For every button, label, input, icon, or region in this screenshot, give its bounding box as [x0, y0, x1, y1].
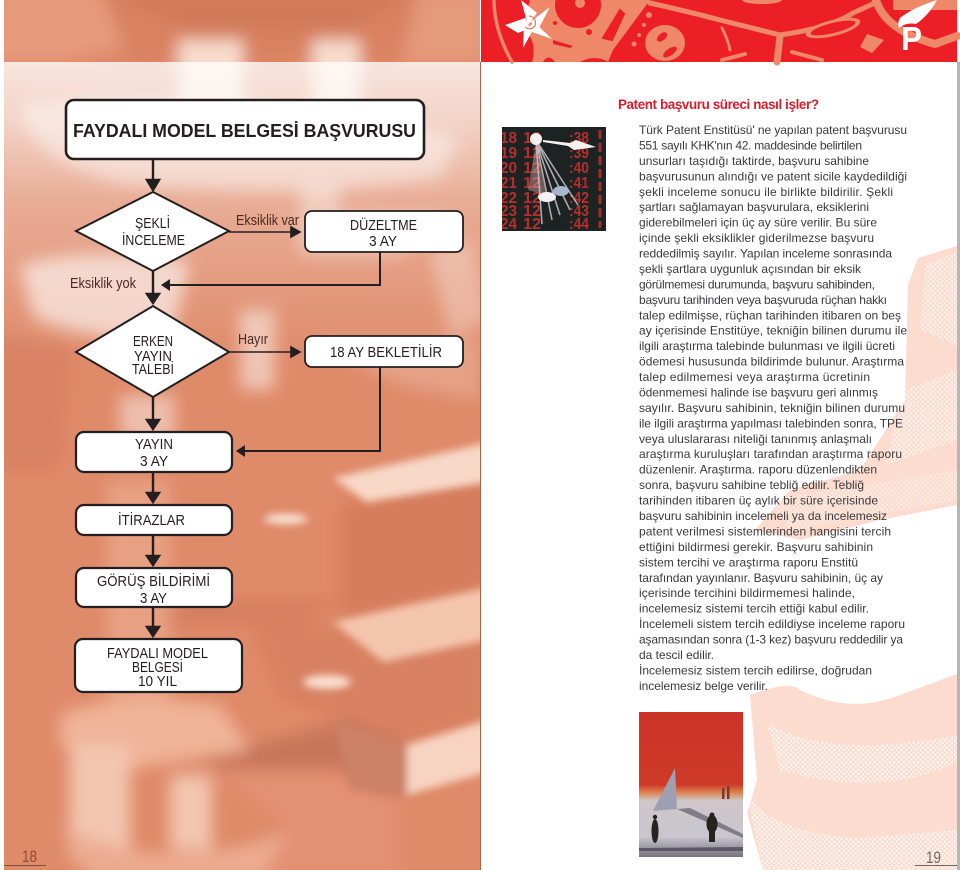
body text: şekli şartlara uygunluk açısından bir eksik	[639, 262, 862, 276]
photo: clock over digital numbers: 18	[500, 130, 517, 147]
diamond: form review: ŞEKLİ	[135, 214, 170, 232]
body text: ilgili araştırma talebinde bulunması ve ilgili ücreti	[639, 339, 895, 353]
arrow: to 18 month wait	[229, 347, 300, 357]
photo: clock over digital numbers: 21	[500, 175, 517, 192]
photo: clock over digital numbers: :43	[569, 203, 589, 220]
diamond: early publication request: ERKEN	[133, 334, 173, 350]
page number 19	[915, 849, 957, 867]
body text: İncelemesiz sistem tercih edilirse, doğrudan	[639, 663, 872, 677]
left page background photo	[0, 0, 495, 870]
body text: veya uluslararası niteliği tanınmış anlaşmalı	[639, 432, 872, 446]
diamond: form review	[76, 192, 229, 271]
body text: şekli inceleme sonucu ile birlikte bildirilir. Şekli	[639, 185, 893, 199]
photo: clock over digital numbers: 12	[523, 160, 541, 177]
arrow: early publication to publication	[147, 397, 159, 429]
photo: clock over digital numbers	[500, 127, 606, 233]
box: utility model certificate 10 years: FAYDALI MODEL	[107, 646, 208, 662]
arrow: objections to opinion	[147, 535, 159, 565]
arrow: publication to objections	[147, 472, 159, 502]
photo: clock over digital numbers: :42	[569, 190, 589, 207]
photo: clock over digital numbers: 20	[500, 160, 517, 177]
arrow: wait to publication	[236, 367, 380, 457]
right page background halftone pattern	[747, 246, 957, 870]
body text: ettiğini bildirmesi gerekir. Başvuru sahibinin	[639, 540, 873, 554]
icon: white pinwheel logo	[505, 0, 552, 48]
arrow: title to form review	[147, 160, 159, 190]
body text: içinde şekli eksiklikler giderilmezse başvuru	[639, 231, 874, 245]
body text: araştırma kuruluşları tarafından araştırma raporu	[639, 447, 902, 461]
body text: ödenmemesi halinde ise başvuru geri alınmış	[639, 386, 878, 400]
label: no: Hayır	[238, 332, 268, 348]
title box: FAYDALI MODEL BELGESİ BAŞVURUSU	[73, 120, 416, 141]
body text: düzenlenir. Araştırma. raporu düzenlendikten	[639, 463, 877, 477]
body text: sayılır. Başvuru sahibinin, tekniğin bilinen durumu	[639, 401, 905, 415]
diamond: early publication request: YAYIN	[134, 349, 172, 365]
box: utility model certificate 10 years	[75, 639, 242, 692]
title box	[66, 100, 424, 159]
photo: clock over digital numbers: 12	[523, 130, 541, 147]
arrow: to correction	[229, 227, 300, 237]
body text: sonra, başvuru sahibine tebliğ edilir. Tebliğ	[639, 478, 864, 492]
diamond: early publication request: TALEBİ	[132, 360, 174, 378]
box: publication 3 months: 3 AY	[140, 454, 168, 470]
box: utility model certificate 10 years: 10 YIL	[138, 674, 177, 690]
photo: clock over digital numbers: 19	[500, 145, 517, 162]
body text: başvuru sahibinin incelemeli ya da incelemesiz	[639, 509, 887, 523]
photo: clock over digital numbers: :38	[569, 130, 589, 147]
body text: ay içerisinde Enstitüye, tekniğin bilinen durumu ile	[639, 324, 907, 338]
page number 18	[4, 848, 46, 866]
body text: incelemesiz sistemi tercih ettiği kabul edilir.	[639, 602, 869, 616]
icon: white P flame logo: P	[901, 20, 922, 57]
photo: clock over digital numbers: :44	[569, 216, 589, 233]
body text: aşamasından sonra (1-3 kez) başvuru reddedilir ya	[639, 632, 903, 646]
photo: clock over digital numbers: 12	[523, 175, 541, 192]
box: opinion notice 3 months	[76, 568, 232, 607]
arrow: correction back to main flow	[161, 252, 380, 291]
box: correction 3 months: 3 AY	[369, 234, 397, 250]
body text: şartları sağlamayan başvurulara, eksiklerini	[639, 200, 869, 214]
body text: ödemesi hususunda bildirimde bulunur. Araştırma	[639, 355, 904, 369]
photo: clock over digital numbers: 24	[500, 216, 517, 233]
box: waits 18 months: 18 AY BEKLETİLİR	[330, 343, 442, 361]
body text	[639, 123, 907, 693]
photo: clock over digital numbers: 23	[500, 203, 517, 220]
body text: patent verilmesi sistemlerinden hangisini tercih	[639, 524, 891, 538]
photo: clock over digital numbers: 12	[523, 216, 541, 233]
box: objections: İTİRAZLAR	[118, 511, 185, 529]
page edges	[480, 62, 960, 870]
arrow: form review to early publication	[147, 271, 159, 303]
body text: içerisinde tercihini bildirmemesi halinde,	[639, 586, 855, 600]
body text: talep edilmemesi veya araştırma ücretinin	[639, 370, 870, 384]
box: publication 3 months	[76, 432, 232, 472]
body text: Türk Patent Enstitüsü' ne yapılan patent başvurusu	[639, 123, 907, 137]
flowchart	[66, 100, 463, 692]
label: deficiency exists: Eksiklik var	[236, 213, 299, 229]
body text: unsurları taşıdığı taktirde, başvuru sahibine	[639, 154, 869, 168]
heading: how the patent process works: Patent başvuru süreci nasıl işler?	[618, 97, 819, 112]
body text: İncelemeli sistem tercih edildiyse inceleme raporu	[639, 617, 905, 631]
box: utility model certificate 10 years: BELGESİ	[132, 658, 183, 676]
photo: clock over digital numbers: :39	[569, 145, 589, 162]
box: correction 3 months	[305, 211, 463, 252]
photo: clock over digital numbers: 22	[500, 190, 517, 207]
diamond: early publication request	[76, 306, 229, 397]
diamond: form review: İNCELEME	[122, 231, 185, 249]
body text: ile ilgili araştırma yapılması talebinden sonra, TPE	[639, 416, 903, 430]
arrow: opinion to certificate	[147, 607, 159, 636]
body text: incelemesiz belge verilir.	[639, 679, 768, 693]
page number 18: 18	[22, 848, 37, 866]
body text: görülmemesi durumunda, başvuru sahibinden,	[639, 277, 875, 291]
box: objections	[76, 505, 232, 535]
page number 19: 19	[926, 849, 941, 867]
salmon top-right strip	[893, 0, 957, 10]
body text: başvuru tarihinden veya başvuruda rüçhan hakkı	[639, 293, 887, 307]
body text: talep edilmişse, rüçhan tarihinden itibaren on beş	[639, 308, 901, 322]
body text: 551 sayılı KHK'nın 42. maddesinde belirtilen	[639, 138, 862, 152]
icon: white P flame logo	[898, 0, 937, 57]
box: opinion notice 3 months: 3 AY	[140, 591, 167, 607]
box: correction 3 months: DÜZELTME	[350, 216, 417, 234]
top red decorative band	[481, 0, 957, 62]
body text: reddedilmiş sayılır. Yapılan inceleme sonrasında	[639, 246, 892, 260]
body text: da tescil edilir.	[639, 648, 714, 662]
body text: başvurusunun alındığı ve patent sicile kaydedildiği	[639, 169, 907, 183]
body text: tarihinden itibaren üç aylık bir süre içerisinde	[639, 494, 878, 508]
photo: clock over digital numbers: 12	[523, 190, 541, 207]
box: opinion notice 3 months: GÖRÜŞ BİLDİRİMİ	[97, 572, 210, 590]
photo: clock over digital numbers: :41	[569, 175, 589, 192]
label: no deficiency: Eksiklik yok	[70, 276, 137, 292]
photo: figures and sundial on red	[639, 712, 743, 857]
box: waits 18 months	[305, 336, 463, 367]
photo: clock over digital numbers: 12	[523, 145, 541, 162]
photo: clock over digital numbers: 12	[523, 203, 541, 220]
body text: giderebilmeleri için üç ay süre verilir. Bu süre	[639, 216, 877, 230]
body text: sistem tercihi ve araştırma raporu Enstitü	[639, 555, 858, 569]
box: publication 3 months: YAYIN	[135, 437, 173, 453]
photo: clock over digital numbers: :40	[569, 160, 589, 177]
body text: tarafından yayınlanır. Başvuru sahibinin, üç ay	[639, 571, 883, 585]
